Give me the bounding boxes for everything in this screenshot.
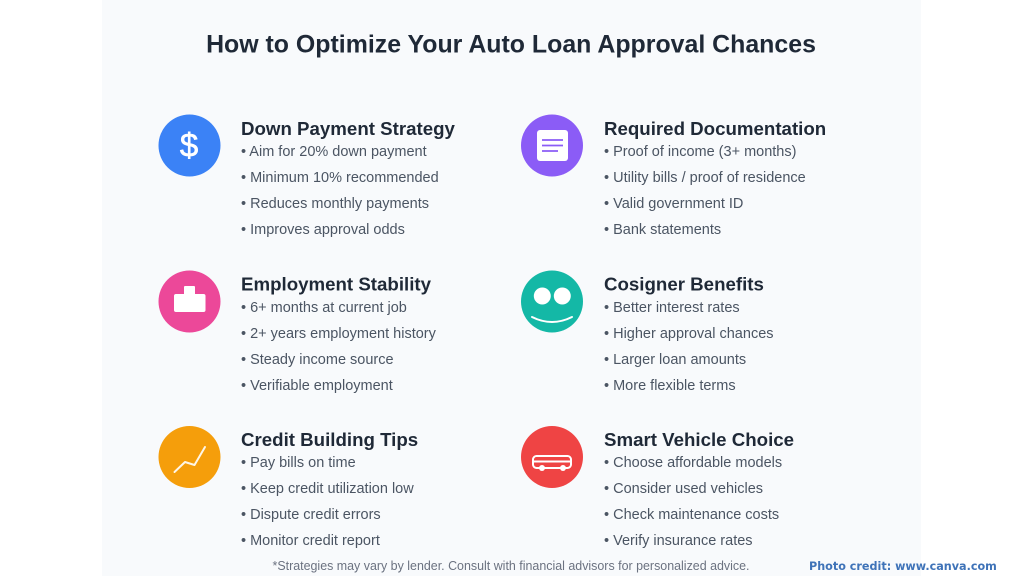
icon: briefcase [158,270,220,332]
heading: employment stability: Employment Stability [241,274,432,294]
icon: smiling face [521,270,583,332]
list: vehicle tips: • Check maintenance costs [604,507,779,523]
list: down payment tips: • Reduces monthly payments [241,196,429,212]
panel: credit building tips [158,426,418,549]
panel: required documentation [521,114,826,238]
photo credit: Photo credit: www.canva.com [809,560,997,573]
list: vehicle tips: • Verify insurance rates [604,533,753,549]
list: credit tips: • Monitor credit report [241,533,380,549]
list: down payment tips [241,144,439,238]
list: employment tips: • Steady income source [241,352,394,368]
list: cosigner benefits: • Higher approval chances [604,326,774,342]
list: employment tips: • Verifiable employment [241,378,393,394]
list: down payment tips: • Minimum 10% recommended [241,170,439,186]
list: cosigner benefits [604,300,774,394]
panel: employment stability [158,270,437,394]
list: vehicle tips: • Choose affordable models [604,455,782,471]
icon: document [521,114,583,176]
list: credit tips [241,455,414,549]
panel: smart vehicle choice [521,426,794,549]
heading: required documentation: Required Documentation [604,118,826,139]
panel: down payment strategy [158,114,456,238]
footnote: *Strategies may vary by lender. Consult with financial advisors for personalized advice. [272,559,750,573]
list: credit tips: • Keep credit utilization low [241,481,414,497]
list: employment tips [241,300,437,394]
list: employment tips: • 2+ years employment history [241,326,437,342]
list: credit tips: • Pay bills on time [241,455,356,471]
heading: down payment strategy: Down Payment Strategy [241,118,456,139]
icon: vehicle [521,426,583,488]
heading: credit building tips: Credit Building Tips [241,429,418,450]
list: documents [604,144,806,238]
list: vehicle tips: • Consider used vehicles [604,481,763,497]
list: cosigner benefits: • Larger loan amounts [604,352,746,368]
icon: rising line chart [158,426,220,488]
icon: dollar sign [158,114,220,176]
heading: cosigner benefits: Cosigner Benefits [604,274,764,294]
heading: smart vehicle choice: Smart Vehicle Choice [604,429,794,450]
list: documents: • Bank statements [604,222,721,238]
list: cosigner benefits: • Better interest rates [604,300,740,316]
icon: dollar sign: $ [180,126,198,164]
list: documents: • Valid government ID [604,196,743,212]
list: vehicle tips [604,455,782,549]
list: documents: • Proof of income (3+ months) [604,144,796,160]
background panel [102,0,921,576]
list: credit tips: • Dispute credit errors [241,507,381,523]
title: How to Optimize Your Auto Loan Approval Chances [206,30,816,58]
list: cosigner benefits: • More flexible terms [604,378,736,394]
list: down payment tips: • Improves approval odds [241,222,405,238]
list: down payment tips: • Aim for 20% down payment [241,144,427,160]
list: documents: • Utility bills / proof of residence [604,170,806,186]
list: employment tips: • 6+ months at current job [241,300,407,316]
panel: cosigner benefits [521,270,774,394]
